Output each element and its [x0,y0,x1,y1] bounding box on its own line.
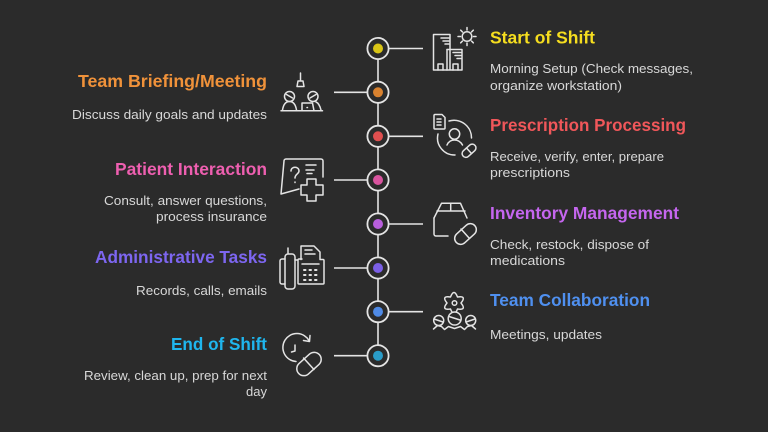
text: Prescription Processing description: prescriptions [490,165,571,180]
text: Inventory Management description [490,237,649,268]
text: End of Shift description: day [246,384,267,399]
text: Prescription Processing description [490,149,664,180]
text: Inventory Management description: medications [490,253,566,268]
connector: Patient Interaction [334,179,367,181]
heading: Start of Shift: Start of Shift [490,28,595,48]
icon: office building with sun [434,28,476,70]
heading: Inventory Management: Inventory Management [490,203,679,223]
text: Administrative Tasks description: Records, calls, emails [136,283,268,298]
timeline spine [377,48,379,356]
icon: fax telephone [280,246,324,289]
heading: Administrative Tasks: Administrative Tasks [95,247,267,267]
text: Team Collaboration description: Meetings, updates [490,327,603,342]
text: End of Shift description [84,368,267,399]
heading: Team Collaboration: Team Collaboration [490,290,650,310]
icon: prescription document, person and pill [434,114,477,159]
node: Patient Interaction [367,169,389,191]
step: Start of Shift [367,28,693,93]
icon: box and pill [434,203,479,247]
heading: Team Briefing/Meeting: Team Briefing/Meeting [78,71,267,91]
connector: Prescription Processing [389,135,423,137]
text: Prescription Processing description: Receive, verify, enter, prepare [490,149,664,164]
node: End of Shift [367,345,389,366]
node: Inventory Management [367,213,389,235]
text: Start of Shift description: Morning Setup (Check messages, [490,61,693,76]
node: Administrative Tasks [367,257,389,279]
text: Start of Shift description: organize workstation) [490,78,622,93]
heading: Patient Interaction: Patient Interaction [115,159,267,179]
text: End of Shift description: Review, clean up, prep for next [84,368,267,383]
node: Team Collaboration [367,301,389,322]
step: Prescription Processing [367,114,686,180]
node: Prescription Processing [367,126,389,147]
step: Patient Interaction [104,159,389,224]
connector: Team Collaboration [389,311,423,313]
connector: Start of Shift [389,48,423,50]
text: Inventory Management description: Check, restock, dispose of [490,237,649,252]
text: Team Briefing description: Discuss daily goals and updates [72,107,268,122]
node: Team Briefing [367,82,389,103]
heading: Prescription Processing: Prescription Processing [490,115,686,135]
text: Patient Interaction description [104,193,267,224]
connector: Inventory Management [389,223,423,225]
step: Team Collaboration [367,290,650,342]
heading: End of Shift: End of Shift [171,334,267,354]
step: Administrative Tasks [95,246,389,298]
icon: meeting with lamp and laptop [281,73,322,111]
text: Patient Interaction description: process insurance [156,209,267,224]
connector: End of Shift [334,355,367,357]
step: Inventory Management [367,203,679,268]
icon: speech bubble with question and medical cross [281,159,323,201]
node: Start of Shift [367,38,389,59]
connector: Administrative Tasks [334,267,367,269]
icon: gear above team of three [434,292,476,330]
step: Team Briefing/Meeting [72,71,389,122]
icon: clock with arrow and pill [283,334,324,379]
text: Start of Shift description [490,61,693,93]
connector: Team Briefing [334,91,367,93]
step: End of Shift [84,334,389,399]
text: Patient Interaction description: Consult, answer questions, [104,193,267,208]
